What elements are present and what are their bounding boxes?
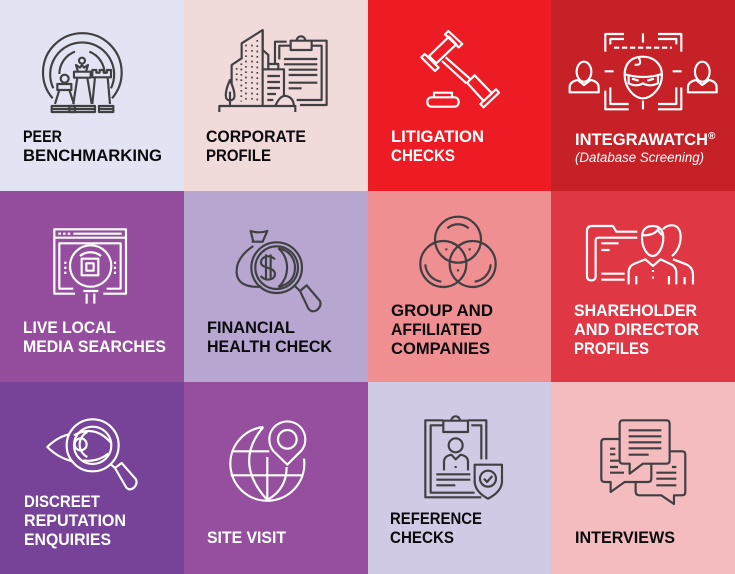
icon: masked face between two people	[570, 33, 717, 109]
label: financial health check: FINANCIAL	[207, 318, 295, 337]
panel: site visit	[184, 382, 368, 574]
icon: folder and two people	[587, 225, 693, 284]
label: corporate profile: CORPORATE	[206, 127, 306, 146]
label: peer benchmarking: BENCHMARKING	[23, 146, 162, 165]
panel: reference checks	[368, 382, 551, 574]
label: integrawatch	[575, 130, 716, 165]
panel: shareholder and director profiles	[551, 191, 735, 382]
label: financial health check: HEALTH CHECK	[207, 337, 333, 356]
label: site visit: SITE VISIT	[207, 528, 287, 547]
label: discreet reputation enquiries: REPUTATION	[24, 511, 126, 530]
label: live local media searches: LIVE LOCAL	[23, 318, 116, 337]
label: discreet reputation enquiries: DISCREET	[24, 492, 101, 511]
label: shareholder and director profiles: AND DIRECTOR	[574, 320, 699, 339]
label: shareholder and director profiles: PROFILES	[574, 339, 649, 358]
label: reference checks: CHECKS	[390, 528, 454, 547]
icon: gavel	[421, 31, 499, 107]
label: financial health check	[207, 318, 333, 356]
label: group and affiliated companies	[391, 301, 493, 358]
label: discreet reputation enquiries	[24, 492, 126, 549]
label: discreet reputation enquiries: ENQUIRIES	[24, 530, 111, 549]
panel: corporate profile	[184, 0, 368, 191]
icon: chess pieces	[43, 33, 122, 112]
label: live local media searches: MEDIA SEARCHES	[23, 337, 166, 356]
panel: discreet reputation enquiries	[0, 382, 184, 574]
label: reference checks: REFERENCE	[390, 509, 482, 528]
icon: city and clipboard	[219, 30, 327, 112]
label: peer benchmarking	[23, 127, 162, 165]
panel: interviews	[551, 382, 735, 574]
panel: integrawatch database screening	[551, 0, 735, 191]
icon: browser window with lens	[54, 229, 126, 304]
label: shareholder and director profiles: SHAREHOLDER	[574, 301, 697, 320]
icon: eye and magnifier	[47, 419, 137, 489]
label: group and affiliated companies: GROUP AND	[391, 301, 493, 320]
icon: speech bubbles	[601, 420, 685, 504]
label: reference checks	[390, 509, 482, 547]
label: live local media searches	[23, 318, 166, 356]
label: group and affiliated companies: COMPANIES	[391, 339, 490, 358]
icon: money bag and magnifier	[237, 231, 321, 311]
label: corporate profile: PROFILE	[206, 146, 271, 165]
label: integrawatch: ®	[708, 131, 716, 142]
label: interviews: INTERVIEWS	[575, 528, 675, 547]
label: corporate profile	[206, 127, 306, 165]
panel: financial health check	[184, 191, 368, 382]
panel: group and affiliated companies	[368, 191, 551, 382]
icon: clipboard with person and shield	[425, 416, 502, 499]
label: peer benchmarking: PEER	[23, 127, 62, 146]
label: integrawatch: (Database Screening)	[575, 150, 704, 165]
label: litigation checks: CHECKS	[391, 146, 455, 165]
label: litigation checks: LITIGATION	[391, 127, 484, 146]
panel: peer benchmarking	[0, 0, 184, 191]
label: litigation checks	[391, 127, 484, 165]
icon: venn diagram	[420, 217, 496, 287]
label: integrawatch: INTEGRAWATCH	[575, 130, 708, 149]
label: group and affiliated companies: AFFILIATED	[391, 320, 482, 339]
icon: globe with location pin	[230, 421, 305, 501]
label: shareholder and director profiles	[574, 301, 699, 358]
panel: litigation checks	[368, 0, 551, 191]
panel: live local media searches	[0, 191, 184, 382]
